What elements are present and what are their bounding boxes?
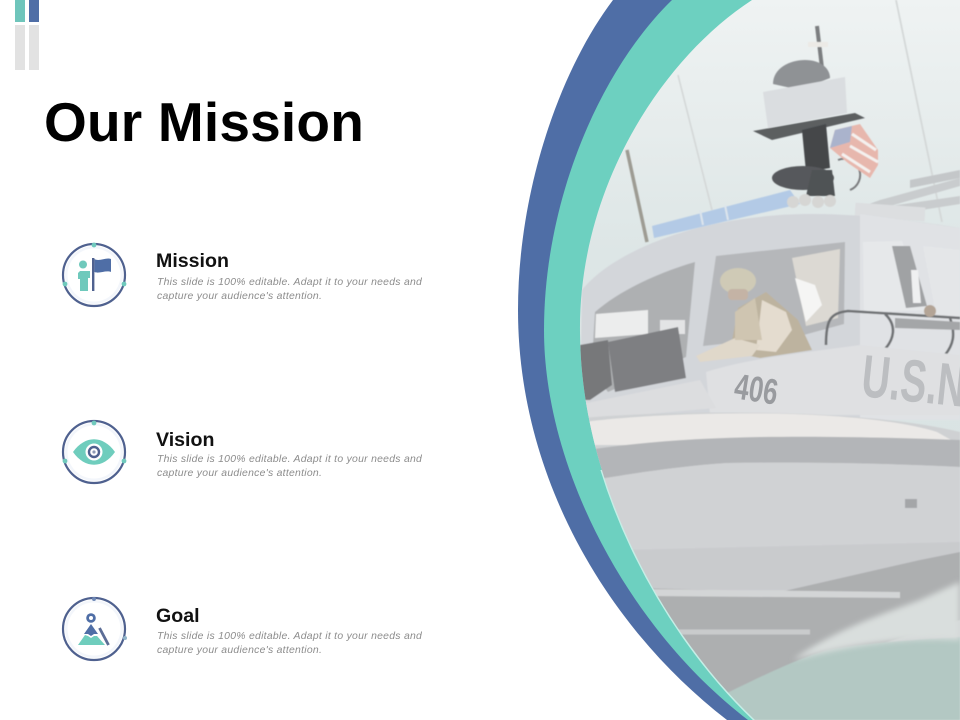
icon: eye: [62, 420, 126, 484]
gun: [580, 340, 612, 400]
horns and rack: [787, 170, 960, 221]
heading: mission: Mission: [156, 250, 229, 272]
water and wake: [727, 637, 960, 720]
panel: mission: [62, 242, 126, 308]
cabin: [582, 214, 860, 418]
text: vision description: [157, 454, 422, 478]
photo: patrol boat: [570, 0, 960, 720]
blue light bar: [652, 190, 800, 238]
panel: curved photo with bands: [518, 0, 960, 720]
railings: [826, 311, 960, 355]
heading: vision: Vision: [156, 429, 214, 451]
teal band: [544, 0, 960, 720]
flag: [830, 124, 878, 178]
right windows: [863, 241, 927, 312]
text: goal description: capture your audience's attention.: [157, 644, 322, 656]
dark hull band: [587, 437, 960, 480]
wake spray: [793, 582, 960, 660]
mast antennas: [678, 0, 942, 222]
heading: goal: Goal: [156, 605, 200, 627]
left window: [593, 262, 695, 392]
title: Our Mission: [44, 91, 364, 153]
icon: flag and person: [62, 242, 126, 308]
text: mission description: [157, 277, 422, 302]
panel: vision: [62, 420, 126, 484]
pale edge line: [600, 470, 755, 720]
text: mission description: This slide is 100% editable. Adapt it to your needs and: [157, 277, 422, 288]
dark pole: [627, 150, 647, 242]
text: vision description: capture your audience's attention.: [157, 468, 322, 478]
text: goal description: This slide is 100% editable. Adapt it to your needs and: [157, 631, 422, 642]
panel: goal: [62, 596, 127, 662]
decorative corner bars: [15, 0, 39, 70]
text: goal description: [157, 631, 422, 656]
white bumper: [584, 413, 960, 445]
hand on rail: [924, 305, 936, 317]
text: mission description: capture your audience's attention.: [157, 290, 322, 302]
soldier: [696, 268, 812, 362]
text: vision description: This slide is 100% editable. Adapt it to your needs and: [157, 454, 422, 465]
blue band: [518, 0, 960, 720]
center window: [703, 242, 845, 346]
radar mast: [753, 26, 865, 196]
hull: [589, 412, 960, 448]
icon: map pin on mountain: [62, 596, 127, 662]
lower cabin side: [706, 345, 960, 415]
hull number: 406: [732, 366, 781, 413]
lower hull shadow: [640, 552, 960, 700]
